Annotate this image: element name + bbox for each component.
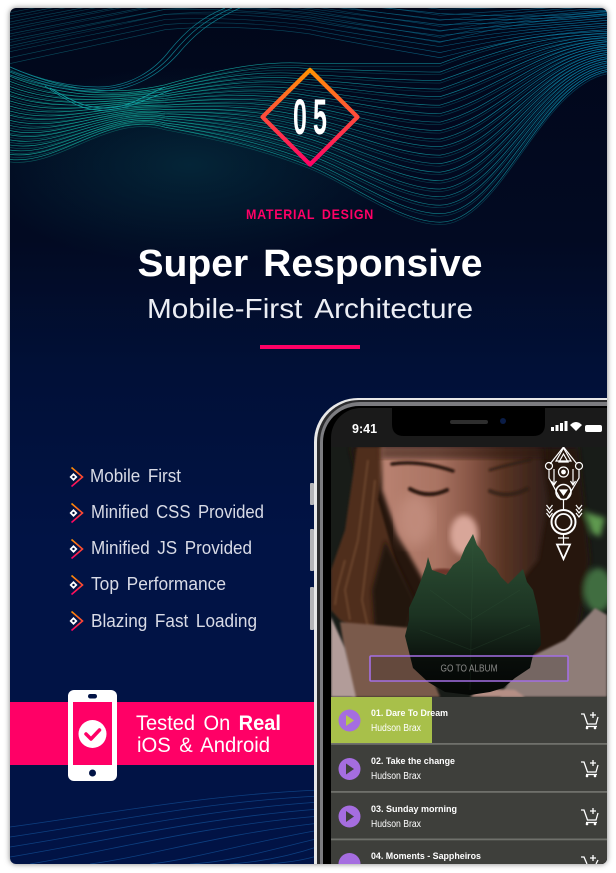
- banner text: iOS & Android: [137, 734, 270, 757]
- top wave pattern: [10, 0, 607, 225]
- track 3: [338, 806, 599, 828]
- item: top performance: Top Performance: [91, 574, 226, 594]
- hair: [331, 447, 397, 626]
- leaf: [405, 534, 541, 695]
- track 1: Hudson Brax: [371, 723, 421, 734]
- status bar: [352, 408, 602, 436]
- go to album button: GO TO ALBUM: [440, 664, 498, 674]
- notch: [392, 408, 545, 436]
- banner text: [136, 714, 280, 752]
- item: mobile first: Mobile First: [90, 466, 181, 486]
- title: Super Responsive: [138, 243, 482, 285]
- feature list: [70, 466, 264, 631]
- clock: 9:41: [352, 422, 377, 436]
- tribal emblem: [546, 447, 582, 559]
- track 1: 01. Dare To Dream: [371, 708, 448, 719]
- item: minified css: Minified CSS Provided: [91, 502, 264, 522]
- track 3: Hudson Brax: [371, 819, 421, 830]
- face: [381, 447, 548, 592]
- go to album button: [370, 656, 568, 681]
- track 2: [338, 758, 599, 780]
- item: minified js: Minified JS Provided: [91, 538, 252, 558]
- bottom wave pattern: [10, 790, 320, 864]
- eyebrow label: MATERIAL DESIGN: [246, 206, 374, 222]
- track 1: [331, 697, 598, 743]
- track list: [331, 697, 607, 864]
- track 2: Hudson Brax: [371, 771, 421, 782]
- phone frame: [310, 398, 607, 864]
- accent underline: [260, 345, 360, 349]
- phone mockup: [310, 398, 612, 864]
- track 3: 03. Sunday morning: [371, 804, 457, 815]
- diamond frame: [262, 70, 358, 164]
- number 05: 05: [293, 90, 333, 145]
- track 2: 02. Take the change: [371, 756, 455, 767]
- icon: phone with check: [68, 690, 117, 781]
- item: blazing fast loading: Blazing Fast Loading: [91, 611, 257, 631]
- number badge: [262, 70, 358, 164]
- track 4: [338, 852, 598, 864]
- track 4: 04. Moments - Sappheiros: [371, 851, 481, 862]
- signal icons: [551, 421, 602, 432]
- album photo: [331, 447, 612, 697]
- subtitle: Mobile-First Architecture: [147, 293, 473, 324]
- pink banner: [10, 690, 314, 781]
- banner text: Tested On Real: [136, 712, 281, 735]
- shirt and chest: [331, 608, 607, 697]
